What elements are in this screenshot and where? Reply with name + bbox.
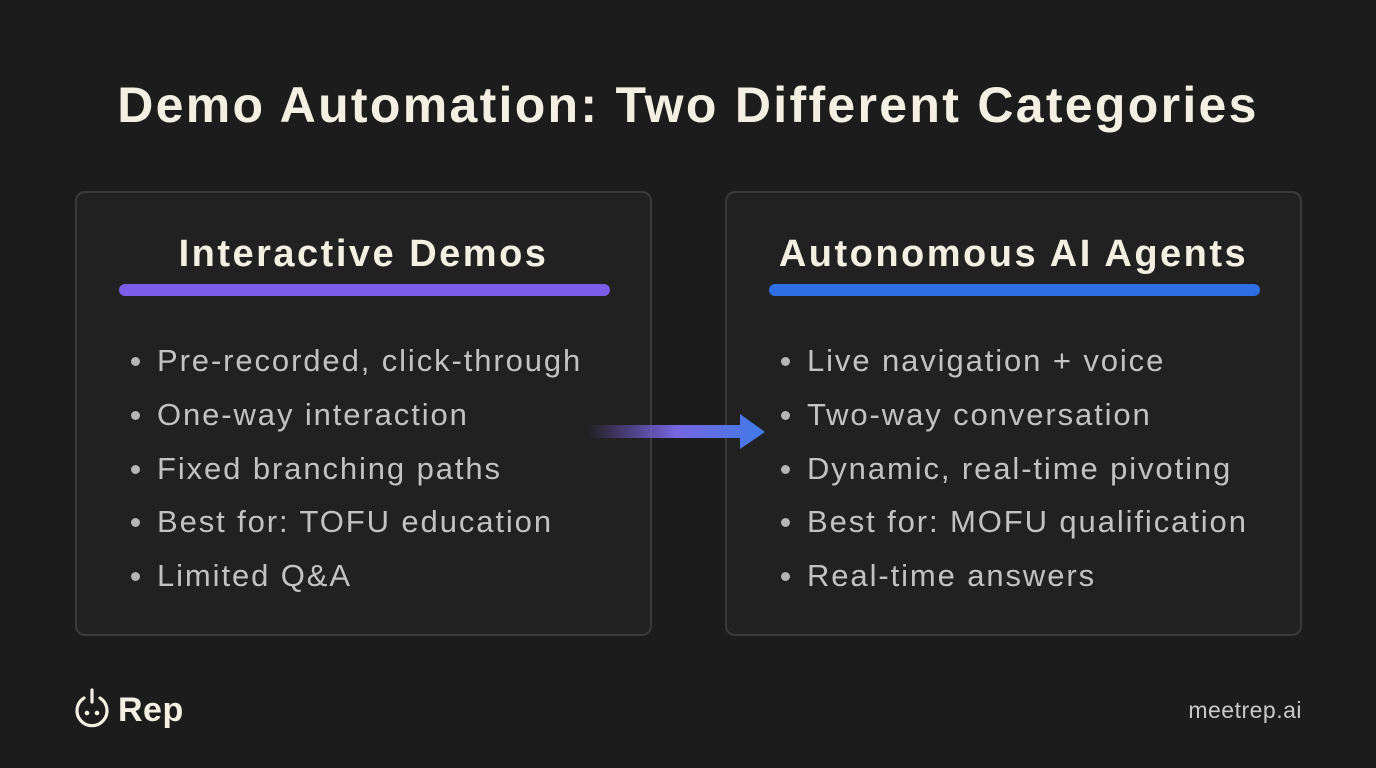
bullet list left: Fixed branching paths [157, 451, 502, 486]
icon: power [75, 688, 109, 728]
heading: interactive demos: Interactive Demos [179, 233, 548, 275]
bullet list left: Best for: TOFU education [157, 504, 553, 539]
bullet list right [781, 343, 1248, 593]
logo: Rep: Rep [118, 690, 184, 728]
bullet list right: Best for: MOFU qualification [807, 504, 1248, 539]
heading: autonomous AI agents: Autonomous AI Agents [779, 233, 1248, 275]
logo: Rep [75, 688, 184, 728]
bullet list left: Pre-recorded, click-through [157, 343, 582, 378]
footer url: meetrep.ai [1188, 697, 1302, 723]
bullet list right: Real-time answers [807, 558, 1096, 593]
bullet list left [131, 343, 582, 593]
bullet list right: Two-way conversation [807, 397, 1152, 432]
arrow [592, 414, 765, 449]
panel: interactive demos [75, 191, 652, 636]
title: Demo Automation: Two Different Categories [117, 77, 1259, 133]
bullet list right: Dynamic, real-time pivoting [807, 451, 1232, 486]
bullet list left: One-way interaction [157, 397, 469, 432]
bullet list left: Limited Q&A [157, 558, 352, 593]
panel: autonomous AI agents [725, 191, 1302, 636]
underline blue [769, 284, 1260, 296]
underline purple [119, 284, 610, 296]
bullet list right: Live navigation + voice [807, 343, 1165, 378]
